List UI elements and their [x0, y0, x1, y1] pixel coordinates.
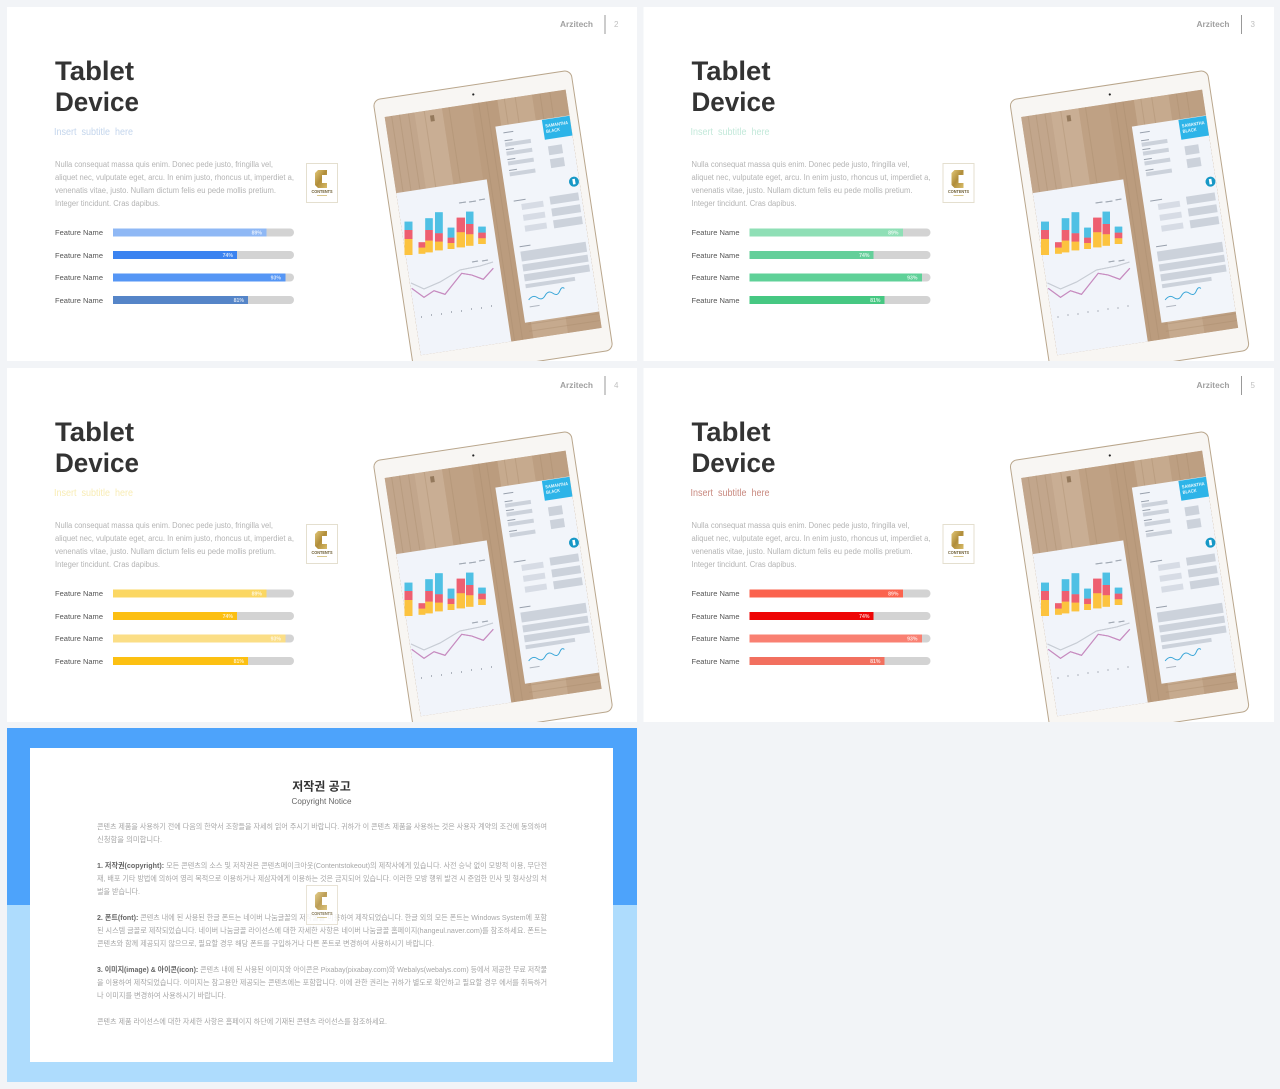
feature bars: Feature Name [692, 612, 740, 621]
tablet image: SAMANTHA [545, 481, 569, 489]
feature bars: Feature Name [692, 251, 740, 260]
title: Tablet [692, 417, 770, 447]
header: brand and page number: 5 [1250, 381, 1256, 390]
title [692, 56, 776, 117]
logo [306, 164, 338, 202]
tablet image [373, 70, 613, 380]
body text: Nulla consequat massa quis enim. Donec pede justo, fringilla vel, [55, 521, 273, 530]
tablet image: SAMANTHA [1181, 120, 1206, 128]
body text: Integer tincidunt. Cras dapibus. [692, 199, 796, 208]
section 3: image and icon [97, 965, 547, 1000]
panel: copyright notice [7, 728, 637, 1082]
feature bars: Feature Name [55, 589, 103, 598]
body text [55, 521, 294, 569]
logo: CONTENTS [312, 911, 333, 916]
title [55, 56, 139, 117]
feature bars: 81% [870, 298, 881, 304]
tablet image: SAMANTHA [1181, 481, 1206, 489]
intro text [97, 822, 547, 844]
header: brand and page number: Arzitech [560, 20, 593, 29]
body text: Integer tincidunt. Cras dapibus. [692, 560, 796, 569]
feature bars: 93% [271, 636, 281, 642]
body text: venenatis vitae, justo. Nullam dictum felis eu pede mollis pretium. [55, 547, 276, 556]
title: Tablet [692, 56, 770, 86]
feature bars: 81% [870, 659, 881, 665]
heading: copyright notice: Copyright Notice [292, 796, 352, 806]
logo: CONTENTS [312, 189, 333, 194]
body text [692, 521, 930, 569]
header: brand and page number [560, 376, 619, 395]
tablet image [1010, 70, 1250, 380]
body text: aliquet nec, vulputate eget, arcu. In enim justo, rhoncus ut, imperdiet a, [55, 173, 294, 182]
intro text: 신청함을 의미합니다. [97, 835, 162, 844]
section 3: image and icon: 을 이용하여 제작되었습니다. 이미지는 참고용만 제공되는 콘텐츠에는 포함합니다. 이에 관한 권리는 귀하가 별도로 확인하고 필요할 경우 에서를 취득하거 [97, 978, 547, 987]
heading: copyright notice [292, 778, 352, 806]
header: brand and page number [560, 15, 619, 34]
feature bars [692, 228, 930, 305]
body text: venenatis vitae, justo. Nullam dictum felis eu pede mollis pretium. [692, 186, 912, 195]
feature bars: 89% [252, 230, 262, 236]
tablet image: BLACK [546, 127, 561, 134]
feature bars: 74% [859, 614, 870, 620]
title: Device [692, 87, 776, 117]
body text [55, 160, 294, 208]
title [692, 417, 776, 478]
section 1: copyright: 재, 배포 기타 방법에 의하여 영리 목적으로 이용하거나 제삼자에게 이용하는 것은 금지되어 있습니다. 이러한 모방 행위 발견 시 준엄한 민사 및 형사상의 처 [97, 874, 547, 883]
subtitle: Insert subtitle here [690, 127, 770, 138]
feature bars: 89% [888, 592, 899, 598]
body text: Nulla consequat massa quis enim. Donec pede justo, fringilla vel, [55, 160, 273, 169]
tablet image [1010, 431, 1250, 741]
panel: slide 2 blue [7, 7, 637, 380]
feature bars: Feature Name [55, 612, 103, 621]
feature bars: Feature Name [692, 589, 740, 598]
feature bars: Feature Name [55, 657, 103, 666]
body text: Nulla consequat massa quis enim. Donec pede justo, fringilla vel, [692, 521, 910, 530]
header: brand and page number: Arzitech [1196, 20, 1230, 29]
body text: venenatis vitae, justo. Nullam dictum felis eu pede mollis pretium. [692, 547, 912, 556]
header: brand and page number: 3 [1250, 20, 1256, 29]
tablet image: BLACK [546, 488, 561, 495]
title [55, 417, 139, 478]
feature bars: 74% [223, 614, 233, 620]
body text: aliquet nec, vulputate eget, arcu. In enim justo, rhoncus ut, imperdiet a, [692, 534, 930, 543]
section 3: image and icon: 3. 이미지(image) & 아이콘(icon): 콘텐츠 내에 된 사용된 이미지와 아이콘은 Pixabay(pixabay.com)와 Webalys(webalys.com) 등에서 제공한 무료 저작물 [97, 965, 547, 974]
subtitle: Insert subtitle here [54, 488, 133, 499]
logo [943, 164, 974, 202]
panel: slide 4 yellow [7, 368, 637, 741]
tablet image: BLACK [1182, 127, 1197, 134]
body text: Nulla consequat massa quis enim. Donec pede justo, fringilla vel, [692, 160, 910, 169]
feature bars: Feature Name [55, 273, 103, 282]
feature bars: 89% [252, 592, 262, 598]
logo: CONTENTS [948, 189, 969, 194]
title: Tablet [55, 417, 134, 447]
feature bars: 93% [907, 636, 918, 642]
section 1: copyright: 1. 저작권(copyright): 모든 콘텐츠의 소스 및 저작권은 콘텐츠메이크아웃(Contentstokeout)의 제작사에게 있습니다. 사전 승낙 없이 모방적 이용, 무단전 [97, 861, 547, 870]
feature bars: Feature Name [692, 296, 740, 305]
feature bars [692, 589, 930, 666]
panel: slide 5 red [644, 368, 1274, 741]
feature bars: 89% [888, 230, 899, 236]
title: Device [55, 448, 139, 478]
header: brand and page number: 2 [614, 20, 619, 29]
body text: aliquet nec, vulputate eget, arcu. In enim justo, rhoncus ut, imperdiet a, [692, 173, 930, 182]
title: Device [692, 448, 776, 478]
feature bars: 93% [271, 276, 281, 282]
feature bars [55, 589, 294, 666]
heading: copyright notice: 저작권 공고 [292, 778, 351, 794]
tablet image: SAMANTHA [545, 120, 569, 128]
feature bars: Feature Name [55, 634, 103, 643]
feature bars: Feature Name [692, 634, 740, 643]
section 3: image and icon: 나 이미지를 변경하여 사용하시기 바랍니다. [97, 991, 226, 1000]
intro text: 콘텐츠 제품을 사용하기 전에 다음의 한약서 조항들을 자세히 읽어 주시기 바랍니다. 귀하가 이 콘텐츠 제품을 사용하는 것은 사용자 계약의 조건에 동의하여 [97, 822, 547, 831]
feature bars: Feature Name [692, 228, 740, 237]
section 2: font: 2. 폰트(font): 콘텐츠 내에 된 사용된 한글 폰트는 네이버 나눔글꼴의 저작물을 이용하여 제작되었습니다. 한글 외의 모든 폰트는 Windows System에 포함 [97, 913, 547, 922]
section 1: copyright: 벌을 받습니다. [97, 887, 140, 896]
header: brand and page number: 4 [614, 381, 619, 390]
feature bars: 81% [234, 659, 244, 665]
header: brand and page number: Arzitech [1196, 381, 1230, 390]
panel: slide 3 green [644, 7, 1274, 380]
feature bars: Feature Name [55, 296, 103, 305]
logo [943, 524, 974, 564]
feature bars [55, 228, 294, 305]
feature bars: 74% [223, 253, 233, 259]
logo [306, 886, 338, 924]
header: brand and page number: Arzitech [560, 381, 593, 390]
title: Device [55, 87, 139, 117]
feature bars: Feature Name [55, 251, 103, 260]
logo: CONTENTS [948, 550, 969, 555]
body text: aliquet nec, vulputate eget, arcu. In enim justo, rhoncus ut, imperdiet a, [55, 534, 294, 543]
section 2: font: 된 시스템 글꼴로 제작되었습니다. 네이버 나눔글꼴 라이선스에 대한 자세한 사항은 네이버 나눔글꼴 홈페이지(hangeul.naver.com)를 참조하세요. 폰트는 [97, 926, 547, 935]
closing note: 콘텐츠 제품 라이선스에 대한 자세한 사항은 홈페이지 하단에 기재된 콘텐츠 라이선스를 참조하세요. [97, 1017, 387, 1026]
logo [306, 524, 338, 564]
feature bars: 81% [234, 298, 244, 304]
feature bars: Feature Name [692, 657, 740, 666]
logo: CONTENTS [312, 550, 333, 555]
feature bars: 93% [907, 276, 918, 282]
section 2: font [97, 913, 547, 948]
header: brand and page number [1196, 15, 1256, 34]
feature bars: Feature Name [692, 273, 740, 282]
section 2: font: 콘텐츠와 함께 제공되지 않으므로, 필요할 경우 해당 폰트를 구입하거나 다른 폰트로 변경하여 사용하시기 바랍니다. [97, 939, 434, 948]
section 1: copyright [97, 861, 547, 896]
header: brand and page number [1196, 376, 1256, 395]
tablet image: BLACK [1182, 488, 1197, 495]
subtitle: Insert subtitle here [54, 127, 133, 138]
body text: venenatis vitae, justo. Nullam dictum felis eu pede mollis pretium. [55, 186, 276, 195]
feature bars: 74% [859, 253, 870, 259]
tablet image [373, 431, 613, 741]
body text: Integer tincidunt. Cras dapibus. [55, 199, 160, 208]
body text [692, 160, 930, 208]
feature bars: Feature Name [55, 228, 103, 237]
title: Tablet [55, 56, 134, 86]
subtitle: Insert subtitle here [690, 488, 770, 499]
body text: Integer tincidunt. Cras dapibus. [55, 560, 160, 569]
